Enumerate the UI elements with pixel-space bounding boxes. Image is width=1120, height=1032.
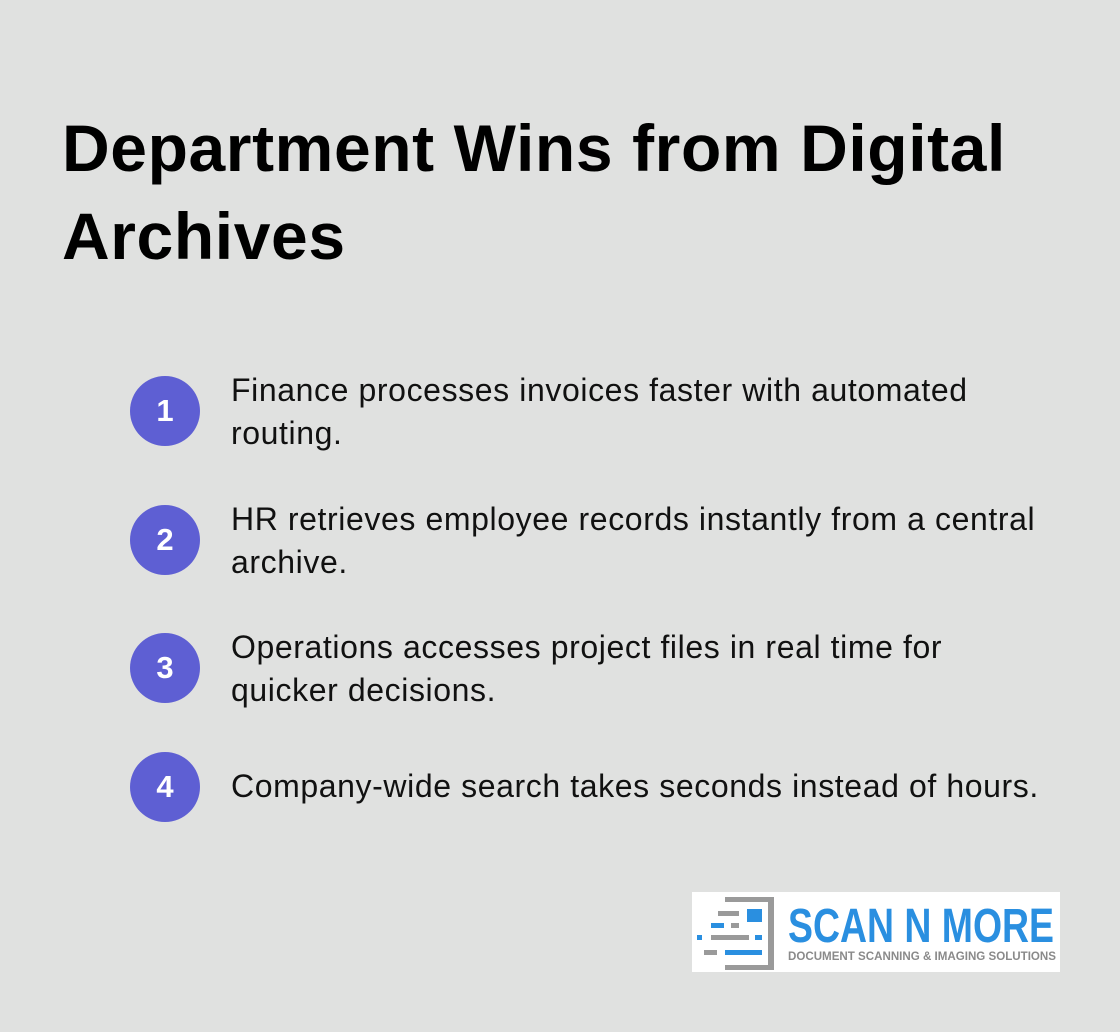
- item 3: Operations accesses project files in real time for: [231, 629, 942, 665]
- logo tagline: DOCUMENT SCANNING & IMAGING SOLUTIONS: [788, 949, 1056, 963]
- item 1: [130, 372, 968, 451]
- item 4: Company-wide search takes seconds instead of hours.: [231, 768, 1039, 804]
- logo: [692, 892, 1060, 972]
- item 1: 1: [156, 393, 174, 428]
- item 2: archive.: [231, 544, 348, 580]
- item 3: quicker decisions.: [231, 672, 496, 708]
- title: Department Wins from Digital: [62, 111, 1006, 185]
- item 4: 4: [156, 769, 174, 804]
- item 2: 2: [156, 522, 174, 557]
- item 3: [130, 629, 942, 708]
- item 1: Finance processes invoices faster with automated: [231, 372, 968, 408]
- item 3: 3: [156, 650, 174, 685]
- title: Archives: [62, 199, 346, 273]
- item 2: HR retrieves employee records instantly from a central: [231, 501, 1035, 537]
- title: [62, 111, 1006, 273]
- item 2: [130, 501, 1035, 580]
- icon: scan mark: [697, 897, 774, 970]
- item 1: routing.: [231, 415, 343, 451]
- item 4: [130, 752, 1039, 822]
